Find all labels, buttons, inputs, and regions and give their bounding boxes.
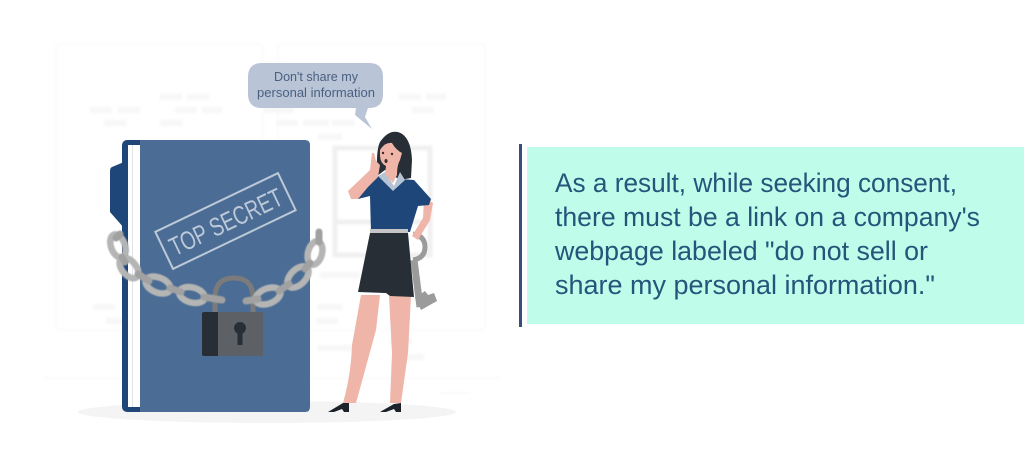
top secret stamp: TOP SECRET	[164, 182, 287, 262]
collar	[378, 172, 405, 191]
padlock	[202, 278, 263, 356]
key	[413, 234, 437, 310]
facial details	[382, 152, 393, 163]
folder tab	[110, 162, 124, 228]
callout text: share my personal information."	[555, 270, 935, 300]
callout panel	[527, 147, 1024, 324]
callout text: webpage labeled "do not sell or	[554, 236, 928, 266]
arm on hip	[412, 198, 433, 240]
secret book	[122, 140, 310, 412]
top secret stamp	[155, 173, 296, 269]
speech bubble: personal information	[257, 86, 375, 100]
divider bar	[519, 144, 522, 327]
belt	[370, 229, 408, 233]
ground shadow	[78, 401, 456, 423]
chain	[107, 232, 325, 308]
callout text: As a result, while seeking consent,	[555, 168, 957, 198]
callout text	[554, 168, 980, 300]
skirt	[358, 233, 414, 297]
arm raised	[348, 153, 380, 199]
woman	[328, 132, 433, 412]
speech bubble	[248, 63, 383, 129]
neck and face	[380, 143, 402, 183]
keyhole	[234, 322, 246, 345]
shoes	[328, 403, 349, 412]
callout text: there must be a link on a company's	[555, 202, 980, 232]
faded background: office building	[44, 44, 500, 394]
hair	[377, 132, 412, 180]
speech bubble: Don't share my	[274, 70, 359, 84]
blouse	[354, 176, 431, 232]
legs	[343, 295, 380, 403]
